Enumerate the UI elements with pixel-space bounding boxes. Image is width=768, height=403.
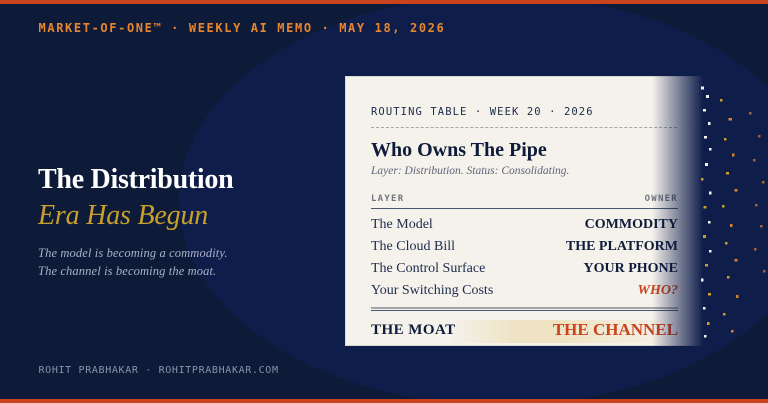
row: the moat xyxy=(371,320,678,339)
headline: first line: The Distribution xyxy=(38,164,233,195)
panel: routing table card xyxy=(345,76,703,346)
subheading text xyxy=(38,246,228,278)
row: the moat: THE CHANNEL xyxy=(553,320,678,339)
row: the moat: THE MOAT xyxy=(371,322,456,338)
subheading text: The model is becoming a commodity. xyxy=(38,246,228,260)
card eyebrow: ROUTING TABLE · WEEK 20 · 2026 xyxy=(371,106,594,118)
row: your switching costs: Your Switching Costs xyxy=(371,283,493,298)
subheading text: The channel is becoming the moat. xyxy=(38,264,216,278)
row: the model: The Model xyxy=(371,217,433,232)
card title: Who Owns The Pipe xyxy=(371,139,547,161)
headline xyxy=(38,164,234,231)
headline: second line: Era Has Begun xyxy=(38,200,208,231)
moat highlight band xyxy=(371,320,678,343)
row: the cloud bill: THE PLATFORM xyxy=(566,239,678,254)
footer byline: ROHIT PRABHAKAR · ROHITPRABHAKAR.COM xyxy=(38,365,279,376)
row: your switching costs: WHO? xyxy=(638,283,678,298)
row: the control surface: The Control Surface xyxy=(371,261,485,276)
row: the model xyxy=(371,217,678,232)
column label: owner: OWNER xyxy=(645,194,678,204)
row: the control surface xyxy=(371,261,678,276)
row: the control surface: YOUR PHONE xyxy=(584,261,678,276)
row: your switching costs xyxy=(371,283,678,298)
column label: layer: LAYER xyxy=(371,194,404,204)
row: the cloud bill: The Cloud Bill xyxy=(371,239,455,254)
header line: MARKET-OF-ONE™ · WEEKLY AI MEMO · MAY 18, 2026 xyxy=(38,21,445,35)
row: the cloud bill xyxy=(371,239,678,254)
row: the model: COMMODITY xyxy=(585,217,678,232)
card subtitle: Layer: Distribution. Status: Consolidating. xyxy=(371,165,569,177)
